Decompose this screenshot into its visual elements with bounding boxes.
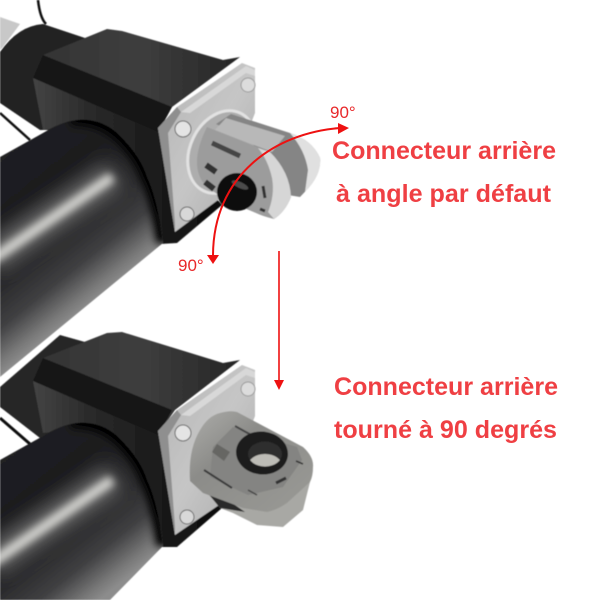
- plate: [158, 63, 255, 232]
- collar: [175, 100, 269, 204]
- clevis back arm: [216, 114, 320, 197]
- rod: [0, 17, 20, 50]
- arrow: down: [274, 251, 284, 390]
- photo: rotated actuator (bottom): [0, 332, 313, 600]
- housing lower: [33, 381, 222, 547]
- cable: [0, 418, 30, 444]
- caption: rotated 90 degrees: tourné à 90 degrés: [334, 416, 557, 444]
- screws: [175, 121, 191, 137]
- rotated connector: [207, 482, 310, 527]
- cables: [0, 0, 46, 140]
- caption: default angle: Connecteur arrière: [332, 137, 556, 165]
- ring: [234, 429, 290, 477]
- housing band: [33, 358, 172, 438]
- label: 90 degrees bottom: 90°: [178, 256, 204, 275]
- caption: default angle: [332, 137, 556, 208]
- main cylinder: [0, 421, 163, 600]
- rear tube: [0, 24, 85, 130]
- bearing: [217, 173, 257, 211]
- housing lower: [33, 78, 222, 244]
- main cylinder: [0, 118, 163, 377]
- caption: default angle: à angle par défaut: [336, 180, 552, 208]
- housing top: [43, 332, 240, 436]
- label: 90 degrees right: 90°: [330, 103, 356, 122]
- caption: rotated 90 degrees: [334, 373, 558, 444]
- housing top: [43, 29, 240, 133]
- photo: default actuator (top): [0, 0, 320, 377]
- clevis front: [197, 127, 291, 219]
- plate: [158, 365, 255, 535]
- caption: rotated 90 degrees: Connecteur arrière: [334, 373, 558, 401]
- housing band: [33, 55, 172, 135]
- arrow: rotation arc: [207, 123, 349, 264]
- rear tube: [0, 335, 85, 440]
